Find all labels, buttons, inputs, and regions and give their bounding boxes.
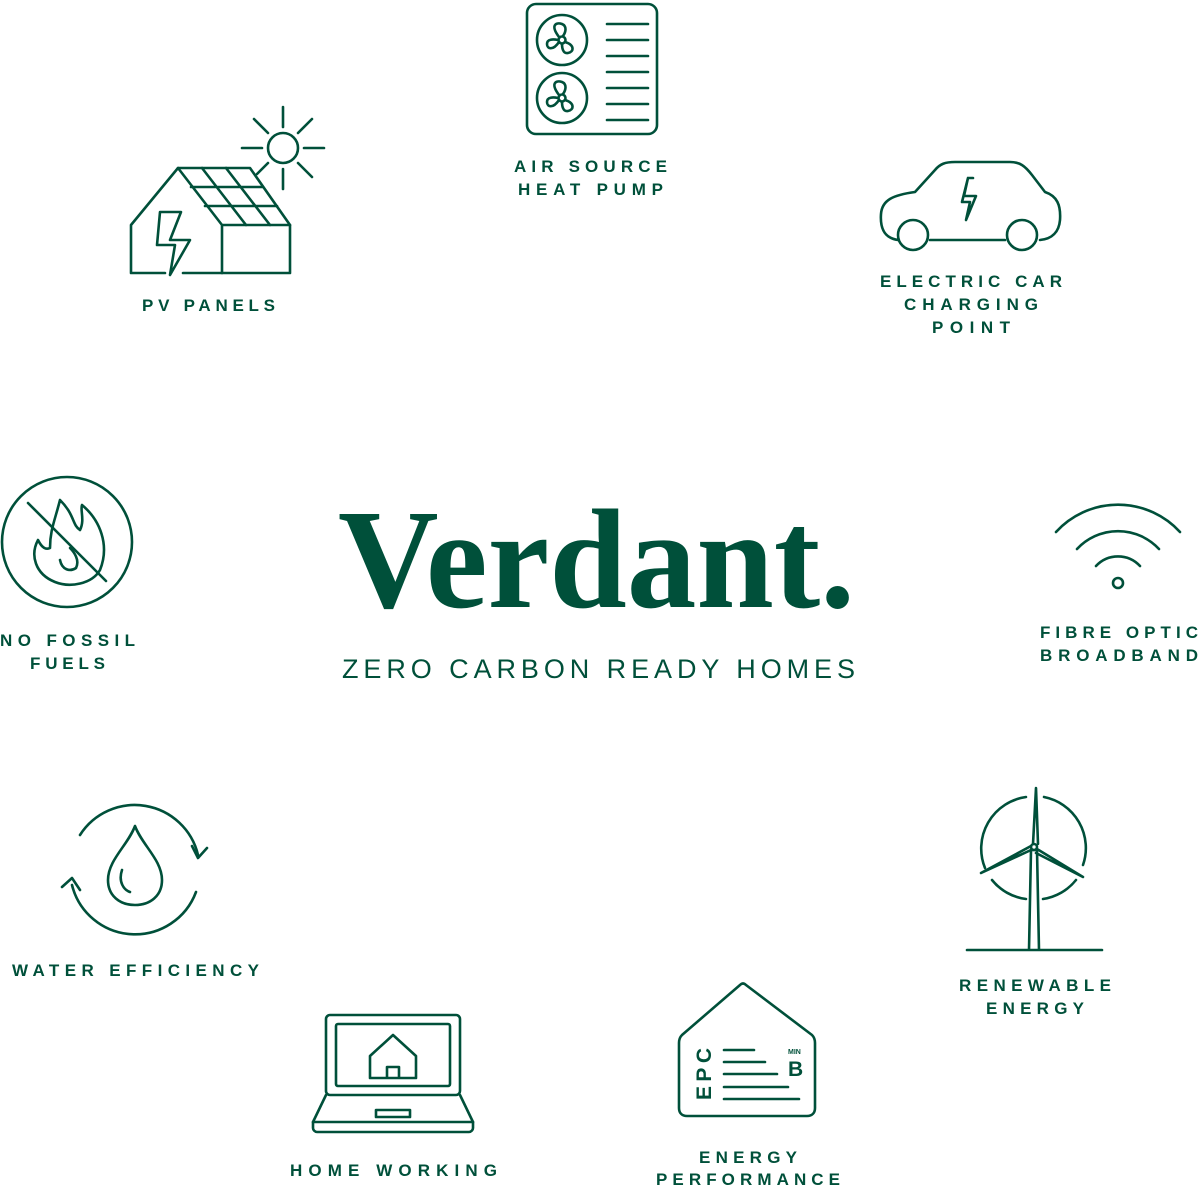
label: energy performance [656,1148,840,1186]
icon: water efficiency [62,805,207,934]
label: pv panels: PV PANELS [142,296,275,315]
label: fibre optic broadband: FIBRE OPTIC [1040,623,1198,642]
label: electric car charging point: POINT [932,318,1011,337]
subtitle: ZERO CARBON READY HOMES [342,654,855,684]
icon: wind turbine [967,788,1102,950]
label: electric car charging point [880,272,1062,337]
label: no fossil fuels: FUELS [30,654,105,673]
icon: energy performance: MIN [788,1049,801,1056]
icon: laptop [313,1015,473,1132]
label: air source heat pump: AIR SOURCE [514,157,667,176]
label: fibre optic broadband [1040,623,1198,665]
label: no fossil fuels [0,631,135,673]
label: electric car charging point: ELECTRIC CAR [880,272,1062,291]
icon: electric car [881,162,1060,250]
icon: energy performance: EPC [693,1048,716,1100]
label: air source heat pump [514,157,667,199]
label: home working: HOME WORKING [290,1161,497,1180]
label: electric car charging point: CHARGING [904,295,1038,314]
icon: no fossil fuels [2,477,132,607]
icon: energy performance [679,984,815,1116]
icon: air source heat pump [527,4,657,134]
label: renewable energy: ENERGY [986,999,1085,1018]
icon: pv panels [131,107,324,275]
label: air source heat pump: HEAT PUMP [518,180,663,199]
label: fibre optic broadband: BROADBAND [1040,646,1198,665]
label: energy performance: ENERGY [699,1148,798,1167]
icon: wifi [1056,505,1180,588]
label: no fossil fuels: NO FOSSIL [0,631,135,650]
title: Verdant. [338,480,855,638]
icon: energy performance: B [788,1058,803,1081]
label: renewable energy [959,976,1111,1018]
label: renewable energy: RENEWABLE [959,976,1111,995]
label: water efficiency: WATER EFFICIENCY [12,961,260,980]
